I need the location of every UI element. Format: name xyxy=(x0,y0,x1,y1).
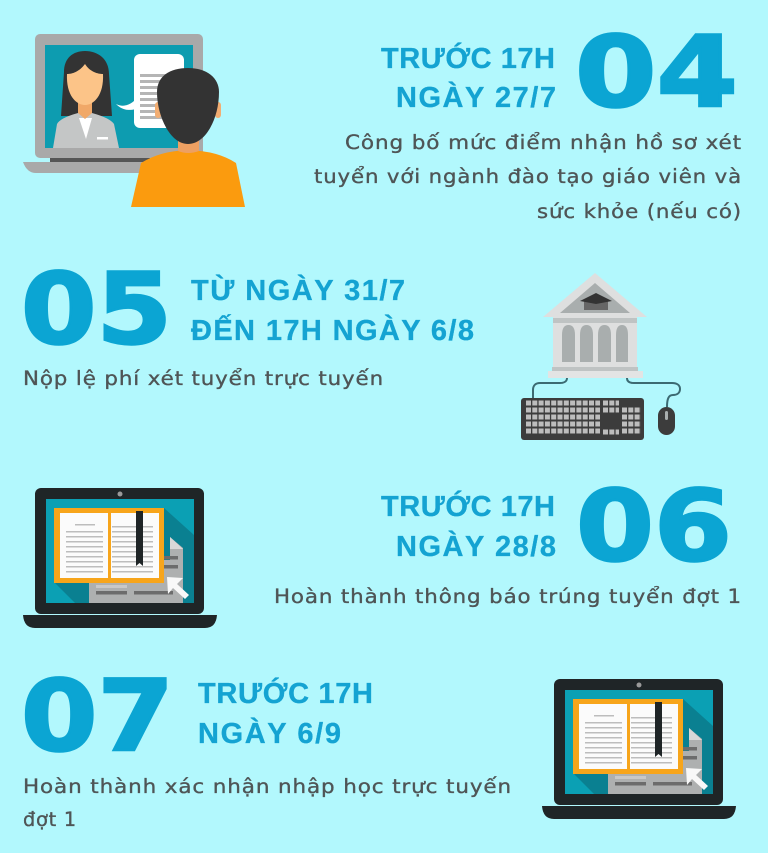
icon: video call on laptop xyxy=(23,34,245,207)
number 06: 06 xyxy=(576,470,732,584)
description 05: Nộp lệ phí xét tuyển trực tuyến xyxy=(23,367,384,390)
description 04: tuyển với ngành đào tạo giáo viên và xyxy=(314,165,742,188)
description 07: Hoàn thành xác nhận nhập học trực tuyến xyxy=(23,775,512,798)
date heading 06 xyxy=(381,489,556,563)
description 04: sức khỏe (nếu có) xyxy=(537,200,742,223)
date heading 04 xyxy=(381,41,556,114)
date heading 07 xyxy=(198,676,373,750)
date heading 05 xyxy=(191,273,474,347)
number 07: 07 xyxy=(21,660,174,774)
description 04: Công bố mức điểm nhận hồ sơ xét xyxy=(345,131,742,154)
number 05: 05 xyxy=(21,253,172,367)
description 07 xyxy=(23,775,512,831)
date heading 07: NGÀY 6/9 xyxy=(198,716,341,750)
date heading 06: TRƯỚC 17H xyxy=(381,489,555,523)
number 04: 04 xyxy=(575,16,738,130)
date heading 06: NGÀY 28/8 xyxy=(396,529,556,563)
date heading 05: ĐẾN 17H NGÀY 6/8 xyxy=(191,313,474,347)
description 06: Hoàn thành thông báo trúng tuyển đợt 1 xyxy=(274,585,742,608)
panel: step 05 xyxy=(21,253,680,440)
description 04 xyxy=(314,131,742,223)
date heading 05: TỪ NGÀY 31/7 xyxy=(191,273,405,307)
icon: laptop with open book xyxy=(542,679,736,819)
icon: laptop with open book xyxy=(23,488,217,628)
date heading 04: TRƯỚC 17H xyxy=(381,41,555,75)
panel: step 06 xyxy=(23,470,742,628)
icon: university building and keyboard xyxy=(521,273,680,440)
date heading 07: TRƯỚC 17H xyxy=(198,676,373,710)
panel: step 07 xyxy=(21,660,736,831)
panel: step 04 xyxy=(23,16,742,223)
description 07: đợt 1 xyxy=(23,808,77,831)
date heading 04: NGÀY 27/7 xyxy=(396,80,556,114)
